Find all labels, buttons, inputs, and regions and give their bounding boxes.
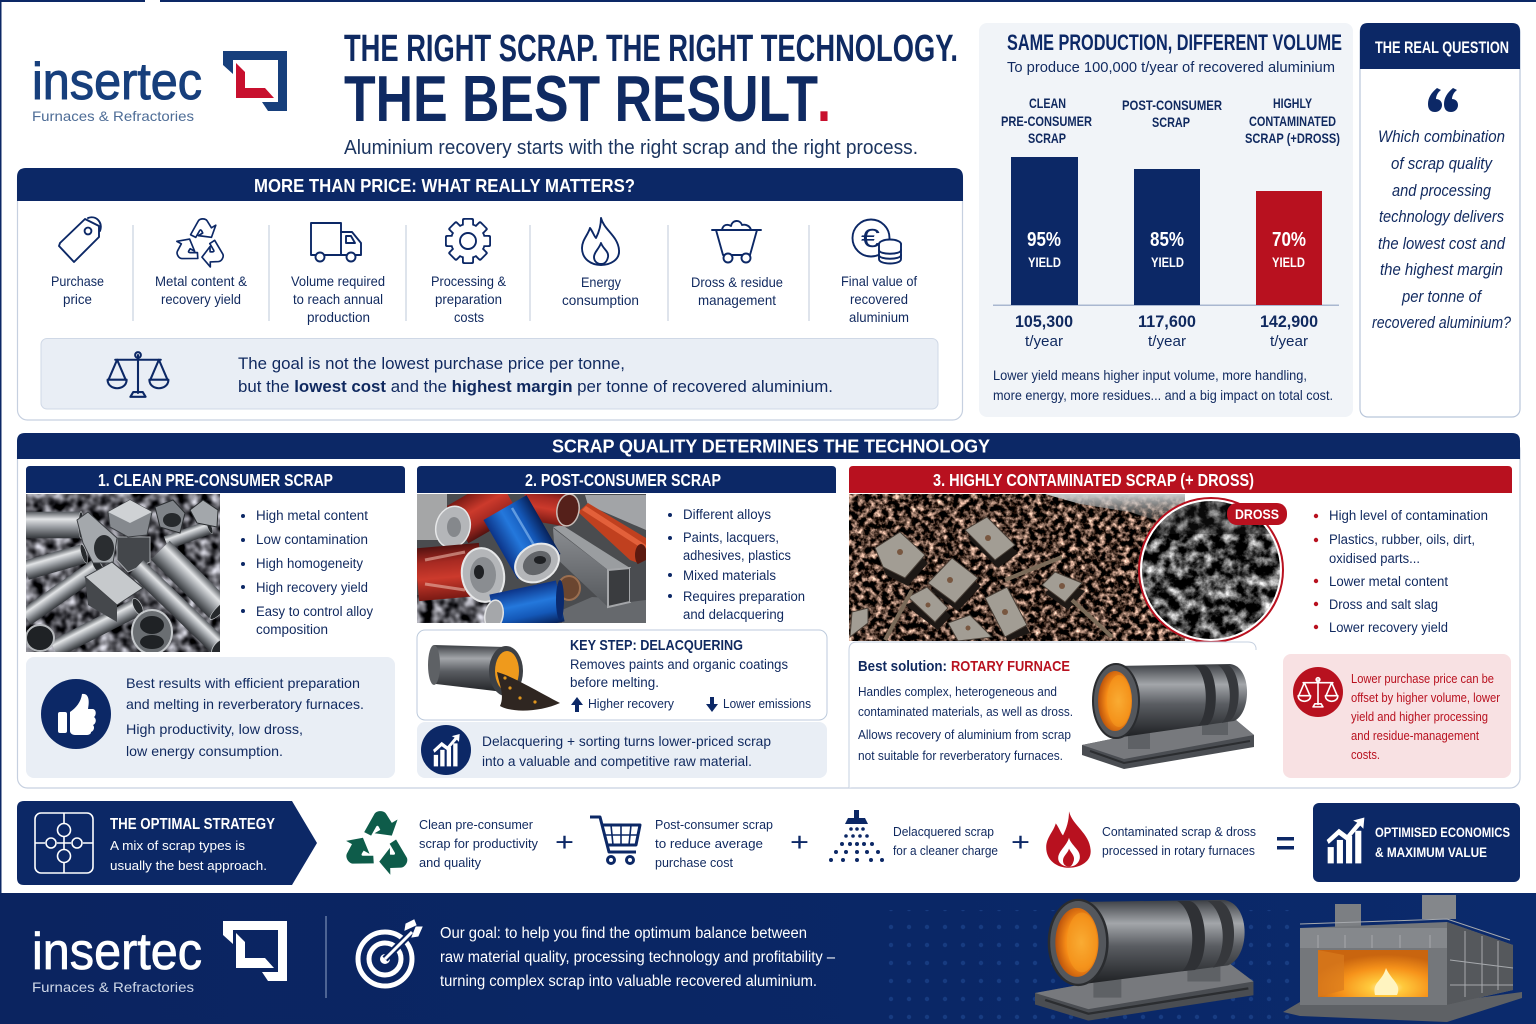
- icon: euro coins: €: [861, 223, 881, 253]
- goal text: The goal is not the lowest purchase price per tonne,: [238, 354, 625, 373]
- column labels: PRE-CONSUMER: [1001, 113, 1092, 129]
- label: metal content: [155, 273, 248, 307]
- logo: insertec: [32, 51, 287, 124]
- label: final value: Final value of: [841, 273, 917, 289]
- logo: insertec: Furnaces & Refractories: [32, 108, 194, 124]
- icon: green recycling: [339, 811, 414, 879]
- footer text: raw material quality, processing technology and profitability –: [440, 949, 835, 966]
- label: energy: [562, 274, 639, 308]
- column labels: SCRAP: [1152, 114, 1190, 130]
- icon: dross cart: [712, 221, 761, 262]
- item: delacquered scrap: [829, 810, 998, 862]
- callout text: and residue-management: [1351, 729, 1479, 743]
- item: contaminated scrap: [1046, 811, 1256, 868]
- item: clean scrap: [339, 811, 538, 879]
- volumes: 142,900: [1260, 312, 1318, 331]
- callout text: Delacquering + sorting turns lower-priced scrap: [482, 733, 771, 749]
- bullet list: [241, 508, 373, 637]
- column 2: post-consumer scrap: [415, 466, 836, 778]
- label: volume required: production: [307, 309, 370, 325]
- label: volume required: to reach annual: [293, 291, 383, 307]
- panel heading: MORE THAN PRICE: WHAT REALLY MATTERS?: [254, 176, 635, 196]
- label: processing: preparation: [435, 291, 502, 307]
- item text: [419, 817, 538, 870]
- callout: key step delacquering: [417, 630, 827, 720]
- section heading: SCRAP QUALITY DETERMINES THE TECHNOLOGY: [552, 436, 990, 456]
- label: processing: [431, 273, 507, 325]
- label: purchase price: [51, 273, 104, 307]
- plus sign: +: [790, 827, 809, 857]
- item text: [1102, 824, 1256, 858]
- callout text: Best solution:: [858, 658, 947, 675]
- callout text: yield and higher processing: [1351, 710, 1488, 724]
- label: volume required: Volume required: [291, 273, 385, 289]
- icon: flame: [582, 218, 619, 265]
- bar: 85%: [1134, 169, 1200, 305]
- label: purchase price: Purchase: [51, 273, 104, 289]
- question text: recovered aluminium?: [1372, 314, 1512, 332]
- label: purchase price: price: [63, 291, 92, 307]
- callout: the goal: [41, 338, 938, 409]
- bullet list: and delacquering: [683, 607, 784, 622]
- question text: the highest margin: [1380, 261, 1503, 279]
- label: final value: aluminium: [849, 309, 909, 325]
- note: more energy, more residues... and a big impact on total cost.: [993, 387, 1333, 403]
- bullet list: Paints, lacquers,: [683, 530, 779, 545]
- panel: more than price: [17, 168, 963, 420]
- illustration: delacquering drum: [428, 645, 560, 711]
- title: THE BEST RESULT: [344, 62, 818, 135]
- column heading: 3. HIGHLY CONTAMINATED SCRAP (+ DROSS): [933, 470, 1254, 490]
- bullet list: Dross and salt slag: [1329, 597, 1438, 612]
- footer text: Our goal: to help you find the optimum balance between: [440, 925, 807, 942]
- result text: [1375, 825, 1510, 860]
- bullet list: Lower metal content: [1329, 574, 1448, 589]
- question text: technology delivers: [1379, 208, 1504, 226]
- icon: quote mark: [1428, 88, 1458, 112]
- bullet list: Lower recovery yield: [1329, 620, 1448, 635]
- illustration: reverberatory furnace: [1283, 895, 1522, 1022]
- bullet list: composition: [256, 622, 328, 637]
- icon: red flame: [1046, 811, 1091, 868]
- volumes: t/year: [1148, 334, 1186, 350]
- callout text: [858, 658, 1073, 763]
- icon: target: [358, 920, 422, 986]
- photo: clean aluminium profiles: [26, 494, 220, 652]
- panel heading: [17, 168, 963, 201]
- column labels: CLEAN: [1029, 95, 1066, 111]
- note: [993, 367, 1333, 403]
- column 3: highly contaminated scrap: [849, 466, 1512, 788]
- volumes: t/year: [1025, 334, 1063, 350]
- icon: puzzle: [35, 813, 93, 873]
- callout text: Handles complex, heterogeneous and: [858, 684, 1057, 699]
- question text: [1372, 128, 1512, 332]
- bullet list: Easy to control alloy: [256, 604, 373, 619]
- callout text: Best results with efficient preparation: [126, 675, 360, 691]
- column labels: SCRAP: [1028, 130, 1066, 146]
- banner text: [110, 816, 275, 873]
- bullet list: [1314, 508, 1488, 635]
- label: processing: costs: [454, 309, 484, 325]
- callout text: before melting.: [570, 675, 659, 690]
- bullet list: Different alloys: [683, 507, 771, 522]
- item text: Delacquered scrap: [893, 824, 994, 839]
- column heading: [26, 466, 405, 493]
- callout: lower purchase price: [1283, 654, 1511, 778]
- column labels: CONTAMINATED: [1249, 113, 1336, 129]
- column heading: [417, 466, 836, 493]
- callout text: and melting in reverberatory furnaces.: [126, 696, 364, 712]
- badge: dross: [1227, 503, 1287, 525]
- bullet list: Low contamination: [256, 532, 368, 547]
- column labels: HIGHLY: [1273, 95, 1312, 111]
- icon: recycling: [171, 219, 228, 270]
- footer logo: insertec: [32, 923, 202, 981]
- panel: the real question: [1360, 23, 1520, 417]
- banner text: THE OPTIMAL STRATEGY: [110, 816, 275, 833]
- label: final value: recovered: [850, 291, 908, 307]
- column labels: SCRAP (+DROSS): [1245, 130, 1340, 146]
- volumes: t/year: [1270, 334, 1308, 350]
- footer logo: Furnaces & Refractories: [32, 979, 194, 995]
- callout text: low energy consumption.: [126, 743, 283, 759]
- inset photo: dross: [1139, 498, 1287, 642]
- label: metal content: Metal content &: [155, 273, 248, 289]
- icon: shopping cart: [590, 817, 640, 864]
- column heading: 1. CLEAN PRE-CONSUMER SCRAP: [98, 470, 333, 490]
- banner: the optimal strategy: [17, 801, 317, 885]
- volumes: 117,600: [1138, 312, 1196, 331]
- title: THE RIGHT SCRAP. THE RIGHT TECHNOLOGY.: [344, 28, 958, 70]
- callout text: [482, 733, 771, 769]
- bullet list: Mixed materials: [683, 568, 776, 583]
- bar: 70%: 70%: [1272, 229, 1306, 251]
- bullet list: High recovery yield: [256, 580, 368, 595]
- item text: purchase cost: [655, 855, 733, 870]
- arrow: lower emissions: Lower emissions: [723, 696, 811, 711]
- illustration: rotary furnace: [1082, 664, 1254, 769]
- footer text: turning complex scrap into valuable recovered aluminium.: [440, 973, 817, 990]
- bar: 95%: YIELD: [1028, 254, 1061, 270]
- callout: best results: [26, 657, 395, 778]
- goal text: but the lowest cost and the highest margin per tonne of recovered aluminium.: [238, 377, 833, 396]
- bar: 70%: [1256, 191, 1322, 305]
- plus sign: +: [555, 827, 574, 857]
- icon: growth chart: [421, 725, 471, 775]
- item text: to reduce average: [655, 836, 763, 851]
- callout text: offset by higher volume, lower: [1351, 691, 1500, 705]
- question text: Which combination: [1378, 128, 1505, 146]
- callout text: ROTARY FURNACE: [951, 658, 1070, 675]
- callout text: Allows recovery of aluminium from scrap: [858, 727, 1071, 742]
- label: final value: [841, 273, 917, 325]
- callout text: Removes paints and organic coatings: [570, 657, 788, 672]
- volumes: 105,300: [1015, 312, 1073, 331]
- photo: contaminated scrap: [849, 494, 1185, 641]
- heading: [1360, 23, 1520, 69]
- footer band: [0, 893, 1536, 1024]
- label: dross: Dross & residue: [691, 274, 783, 290]
- item text: for a cleaner charge: [893, 843, 998, 858]
- footer text: [440, 925, 835, 990]
- volumes: [1015, 312, 1318, 350]
- callout text: [570, 637, 788, 690]
- callout text: [126, 675, 364, 759]
- callout text: [1351, 672, 1500, 762]
- item text: scrap for productivity: [419, 836, 538, 851]
- heading: SAME PRODUCTION, DIFFERENT VOLUME: [1007, 30, 1342, 55]
- bullet list: [668, 507, 805, 622]
- column labels: POST-CONSUMER: [1122, 97, 1222, 113]
- icon: red scales: [1293, 667, 1343, 717]
- banner text: A mix of scrap types is: [110, 838, 246, 853]
- icon: euro coins: [852, 220, 901, 264]
- icon: gear: [445, 218, 491, 264]
- column heading: 2. POST-CONSUMER SCRAP: [525, 470, 721, 490]
- footer logo: [32, 921, 287, 995]
- item text: Clean pre-consumer: [419, 817, 534, 832]
- label: energy: Energy: [581, 274, 621, 290]
- callout text: High productivity, low dross,: [126, 721, 303, 737]
- bar chart: [993, 157, 1339, 306]
- item text: and quality: [419, 855, 481, 870]
- title: [344, 28, 958, 135]
- bullet list: High level of contamination: [1329, 508, 1488, 523]
- item text: [655, 817, 773, 870]
- label: metal content: recovery yield: [161, 291, 241, 307]
- question text: the lowest cost and: [1378, 235, 1506, 253]
- bullet list: adhesives, plastics: [683, 548, 791, 563]
- equals sign: [1277, 837, 1294, 850]
- illustration: rotary furnace: [1035, 900, 1253, 1021]
- icon: thumbs up: [41, 679, 111, 749]
- bullet list: High metal content: [256, 508, 368, 523]
- callout text: not suitable for reverberatory furnaces.: [858, 748, 1063, 763]
- column labels: [1001, 95, 1340, 146]
- icon: price tag: [59, 217, 101, 262]
- panel: scrap quality determines the technology: [17, 433, 1520, 788]
- note: Lower yield means higher input volume, more handling,: [993, 367, 1307, 383]
- goal text: [238, 354, 833, 396]
- callout text: costs.: [1351, 748, 1380, 762]
- label: dross: management: [698, 292, 776, 308]
- item text: processed in rotary furnaces: [1102, 843, 1255, 858]
- callout: delacquering + sorting: [417, 722, 827, 778]
- logo: insertec: insertec: [32, 53, 202, 111]
- callout text: Lower purchase price can be: [1351, 672, 1494, 686]
- bar: 85%: YIELD: [1151, 254, 1184, 270]
- bar: 95%: [1011, 157, 1078, 305]
- panel: same production, different volume: [979, 23, 1353, 417]
- title: .: [817, 62, 831, 135]
- subheading: To produce 100,000 t/year of recovered aluminium: [1007, 59, 1335, 76]
- icon: truck: [311, 223, 361, 262]
- bullet list: Requires preparation: [683, 589, 805, 604]
- result box: optimised economics: [1313, 803, 1520, 882]
- column 1: clean pre-consumer scrap: [21, 466, 405, 778]
- icon: scales: [108, 352, 168, 397]
- subtitle: Aluminium recovery starts with the right scrap and the right process.: [344, 137, 918, 159]
- callout text: into a valuable and competitive raw material.: [482, 753, 752, 769]
- callout: best solution rotary furnace: [849, 642, 1256, 788]
- question text: of scrap quality: [1391, 155, 1494, 173]
- icon: shower spray: [829, 810, 884, 862]
- bullet list: Plastics, rubber, oils, dirt,: [1329, 532, 1475, 547]
- photo: cans and painted profiles: [417, 494, 646, 623]
- callout text: KEY STEP: DELACQUERING: [570, 637, 743, 654]
- result text: OPTIMISED ECONOMICS: [1375, 825, 1510, 840]
- column heading: [849, 466, 1512, 493]
- question text: and processing: [1392, 182, 1492, 200]
- plus sign: +: [1011, 827, 1030, 857]
- item text: Post-consumer scrap: [655, 817, 773, 832]
- item: post-consumer scrap: [590, 817, 773, 870]
- item text: Contaminated scrap & dross: [1102, 824, 1256, 839]
- bullet list: oxidised parts...: [1329, 551, 1420, 566]
- result text: & MAXIMUM VALUE: [1375, 845, 1487, 860]
- question text: per tonne of: [1401, 288, 1483, 306]
- banner text: usually the best approach.: [110, 858, 267, 873]
- bullet list: High homogeneity: [256, 556, 363, 571]
- callout text: contaminated materials, as well as dross.: [858, 704, 1073, 719]
- bar: 95%: 95%: [1027, 229, 1061, 251]
- label: processing: Processing &: [431, 273, 507, 289]
- item text: [893, 824, 998, 858]
- bar: 85%: 85%: [1150, 229, 1184, 251]
- icon: growth chart: [1327, 818, 1364, 863]
- bar: 70%: YIELD: [1272, 254, 1305, 270]
- section heading: [17, 433, 1520, 459]
- label: dross: [691, 274, 783, 308]
- label: energy: consumption: [562, 292, 639, 308]
- badge: dross: DROSS: [1235, 506, 1279, 522]
- label: volume required: [291, 273, 385, 325]
- arrow: higher recovery: Higher recovery: [588, 696, 674, 711]
